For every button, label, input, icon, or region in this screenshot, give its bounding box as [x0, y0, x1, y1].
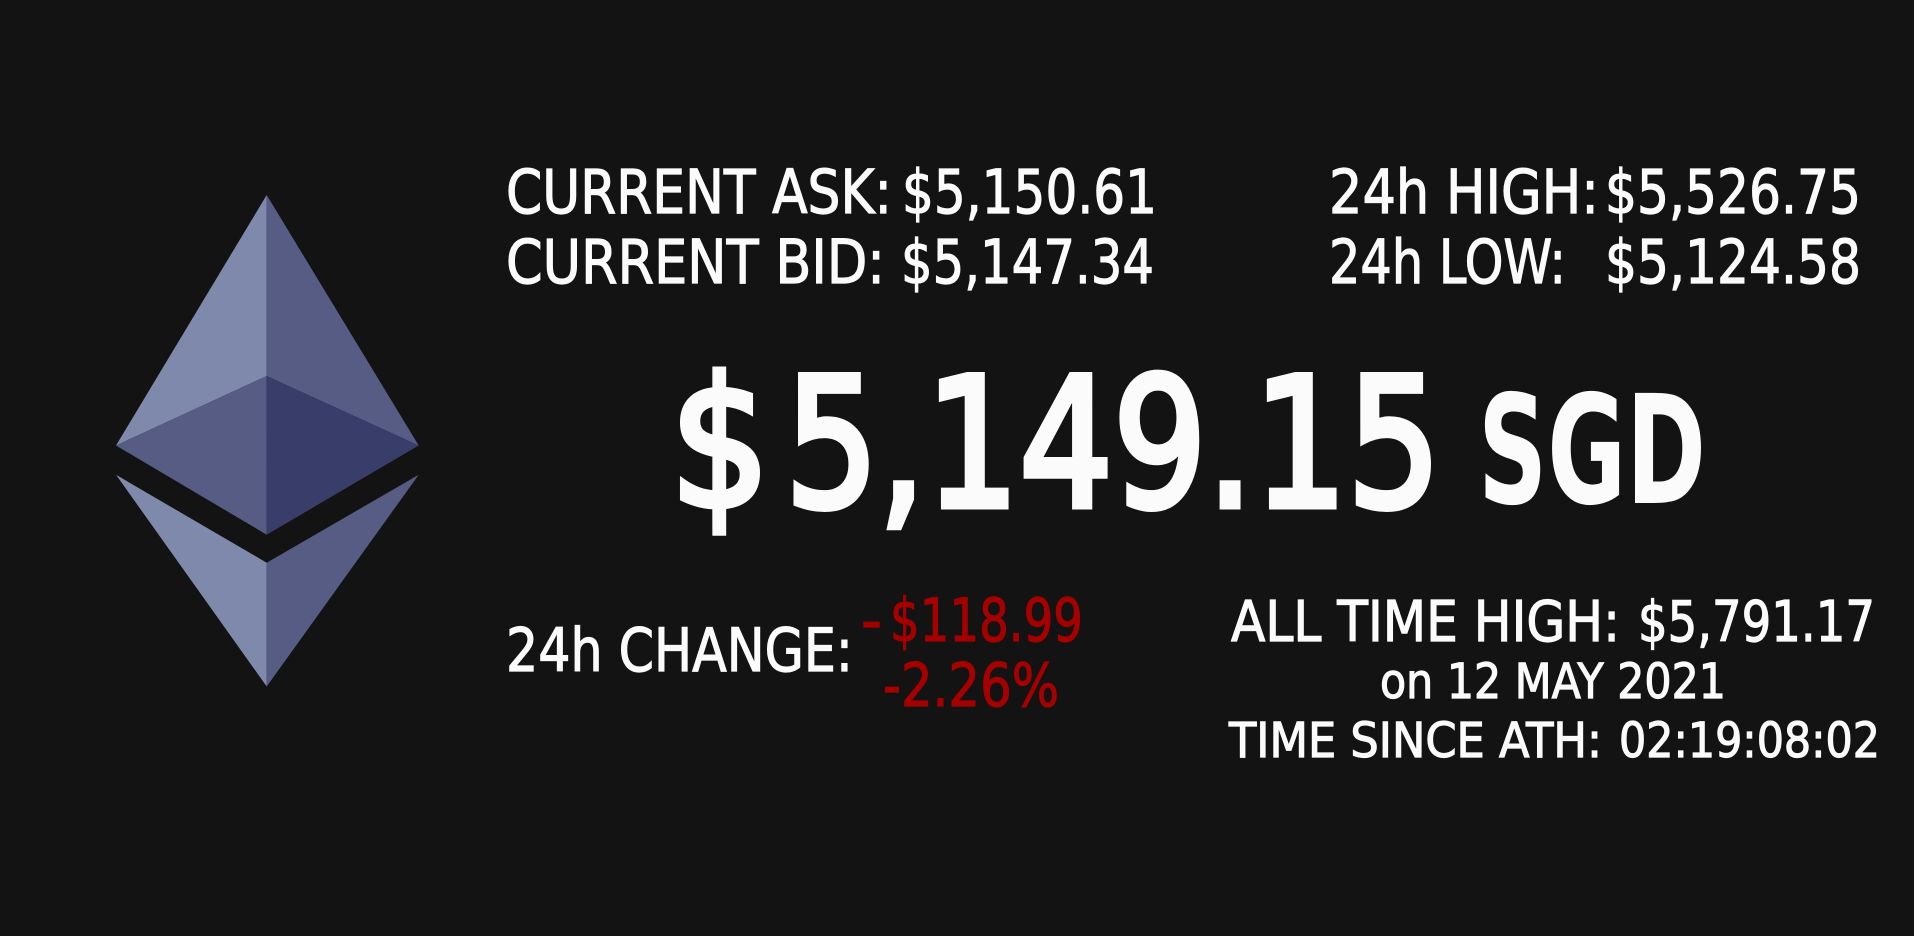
24h low label: 24h LOW:	[1329, 227, 1566, 298]
icon: ethereum logo	[116, 195, 419, 686]
current ask label: CURRENT ASK:	[506, 157, 892, 228]
main price	[670, 341, 1706, 549]
panel: all time high	[1228, 590, 1880, 769]
panel: 24h change	[506, 586, 1083, 721]
panel: current ask and bid	[506, 157, 1157, 298]
24h change label: 24h CHANGE:	[506, 616, 853, 686]
24h high value: $5,526.75	[1605, 157, 1861, 228]
change amount: $118.99	[890, 586, 1083, 656]
currency code: SGD	[1478, 363, 1706, 539]
current bid label: CURRENT BID:	[506, 227, 885, 298]
current bid value: $5,147.34	[901, 227, 1154, 298]
all time high label: ALL TIME HIGH:	[1231, 590, 1620, 655]
24h low value: $5,124.58	[1605, 227, 1861, 298]
time since ath label: TIME SINCE ATH:	[1228, 713, 1602, 769]
panel: 24h high and low	[1329, 157, 1861, 298]
24h high label: 24h HIGH:	[1329, 157, 1599, 228]
time since ath value: 02:19:08:02	[1619, 713, 1880, 769]
all time high date: on 12 MAY 2021	[1380, 654, 1726, 710]
price value: 5,149.15	[785, 341, 1441, 549]
change amount minus sign: -	[861, 586, 882, 656]
current ask value: $5,150.61	[902, 157, 1157, 228]
change percent: -2.26%	[883, 651, 1059, 721]
dollar sign: $	[670, 341, 770, 549]
